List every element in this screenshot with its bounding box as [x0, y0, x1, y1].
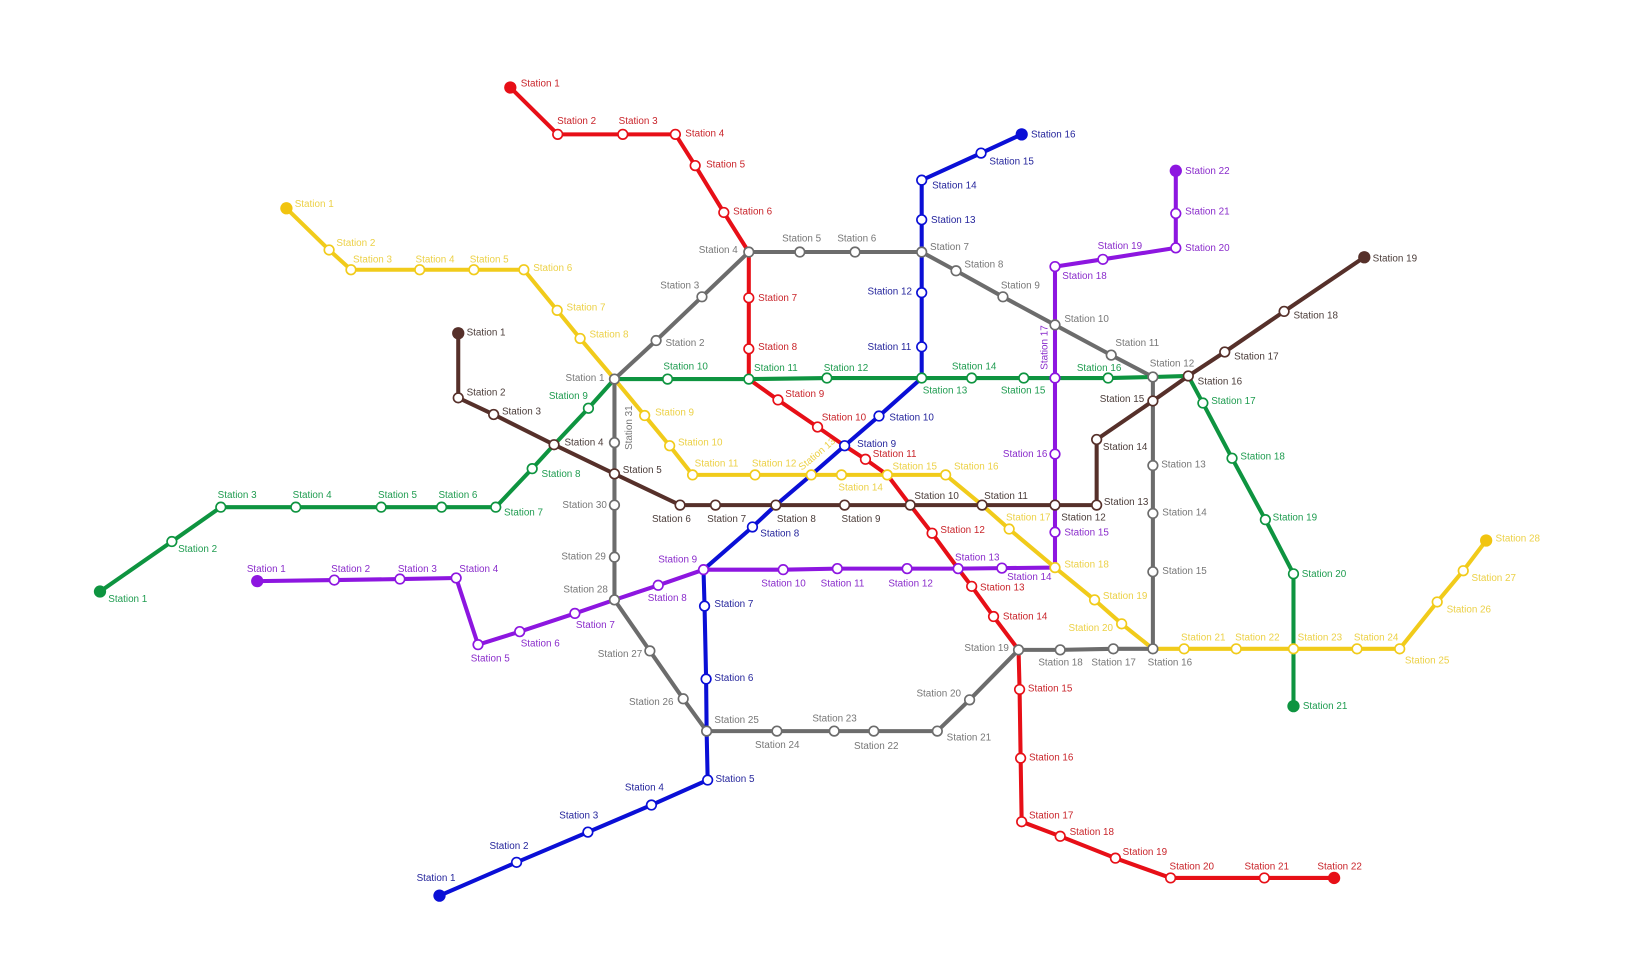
gray line labels: Station 2 [665, 338, 704, 349]
red line labels: Station 8 [758, 342, 798, 353]
brown line labels: Station 17 [1234, 351, 1279, 362]
green line labels: Station 16 [1077, 363, 1122, 374]
red line labels: Station 19 [1123, 847, 1168, 858]
gray line labels: Station 28 [563, 585, 608, 596]
gray line labels: Station 24 [755, 740, 800, 751]
purple line labels: Station 5 [471, 653, 510, 664]
red line labels: Station 17 [1029, 811, 1073, 822]
gray line labels: Station 3 [660, 280, 700, 291]
gray line labels: Station 9 [1001, 280, 1040, 291]
green line labels: Station 8 [542, 469, 581, 480]
purple line route [257, 171, 1176, 645]
blue line labels: Station 9 [857, 439, 897, 450]
purple line stations [251, 165, 1182, 649]
green line labels: Station 4 [293, 490, 332, 501]
gray line labels: Station 14 [1162, 508, 1207, 519]
brown line labels: Station 8 [777, 514, 816, 525]
blue interchanges [840, 441, 849, 451]
green line [94, 362, 1348, 712]
blue line labels: Station 5 [715, 774, 755, 785]
yellow line labels: Station 7 [567, 302, 606, 313]
red line stations [504, 81, 1340, 884]
yellow line labels: Station 12 [752, 459, 796, 470]
red line labels: Station 18 [1070, 827, 1115, 838]
yellow line labels: Station 27 [1472, 573, 1516, 584]
brown line [452, 251, 1418, 525]
red line labels: Station 22 [1317, 862, 1362, 873]
brown line stations [452, 251, 1370, 510]
red line labels: Station 2 [557, 116, 596, 127]
blue line labels: Station 10 [889, 413, 934, 424]
yellow interchanges [807, 470, 1298, 654]
brown line labels: Station 18 [1293, 311, 1338, 322]
brown line labels: Station 9 [841, 514, 881, 525]
purple line labels: Station 11 [821, 578, 865, 589]
green line stations [94, 373, 1300, 712]
purple line labels: Station 17 [1040, 325, 1051, 370]
yellow line labels: Station 20 [1069, 623, 1114, 634]
purple line labels: Station 10 [761, 578, 806, 589]
brown line labels: Station 3 [502, 406, 541, 417]
yellow line labels: Station 17 [1006, 513, 1051, 524]
red line labels: Station 1 [521, 78, 560, 89]
yellow line labels: Station 23 [1298, 632, 1343, 643]
green line labels: Station 21 [1303, 701, 1348, 712]
brown interchanges [549, 371, 1193, 510]
purple line labels: Station 7 [576, 620, 615, 631]
gray line labels: Station 4 [699, 245, 738, 256]
purple line labels: Station 15 [1064, 527, 1109, 538]
red line labels: Station 21 [1245, 862, 1290, 873]
blue line labels: Station 14 [932, 181, 977, 192]
blue line labels: Station 2 [489, 841, 528, 852]
gray line labels: Station 21 [947, 732, 992, 743]
green line labels: Station 7 [504, 508, 543, 519]
red line [504, 78, 1362, 884]
blue line labels: Station 8 [760, 528, 800, 539]
green line labels: Station 12 [824, 363, 868, 374]
yellow line labels: Station 24 [1354, 632, 1399, 643]
gray line labels: Station 26 [629, 697, 674, 708]
blue line labels: Station 15 [989, 157, 1034, 168]
gray line labels: Station 19 [964, 643, 1009, 654]
brown line labels: Station 7 [707, 514, 746, 525]
brown line labels: Station 5 [623, 465, 662, 476]
blue line labels: Station 12 [868, 287, 912, 298]
yellow line labels [295, 199, 1541, 666]
blue line labels: Station 1 [417, 873, 456, 884]
blue line labels: Station 6 [714, 673, 754, 684]
gray line route [614, 252, 1153, 731]
purple line labels: Station 12 [888, 578, 933, 589]
purple line labels: Station 1 [247, 564, 286, 575]
gray interchanges [610, 247, 1158, 736]
blue line [417, 128, 1076, 902]
gray line labels: Station 25 [714, 715, 759, 726]
red line route [510, 87, 1334, 878]
yellow line stations [280, 202, 1492, 654]
brown line labels: Station 13 [1104, 497, 1149, 508]
red line labels: Station 5 [706, 160, 746, 171]
green line route [100, 376, 1293, 706]
gray line labels: Station 18 [1038, 657, 1083, 668]
gray line stations [610, 247, 1158, 736]
gray line labels: Station 20 [916, 689, 961, 700]
yellow line labels: Station 22 [1235, 632, 1280, 643]
red line labels: Station 16 [1029, 752, 1074, 763]
purple interchanges [699, 373, 1060, 574]
purple line labels: Station 14 [1007, 572, 1052, 583]
green line labels: Station 9 [549, 391, 588, 402]
brown line labels: Station 15 [1100, 394, 1145, 405]
gray line labels: Station 16 [1148, 657, 1193, 668]
red line labels: Station 15 [1028, 684, 1073, 695]
yellow line labels: Station 26 [1447, 604, 1492, 615]
green line labels: Station 10 [663, 362, 708, 373]
green line labels: Station 5 [378, 490, 418, 501]
green line labels: Station 3 [218, 490, 257, 501]
yellow line labels: Station 3 [353, 254, 393, 265]
interchange stations [549, 247, 1298, 736]
green line labels: Station 1 [108, 594, 148, 605]
red line labels: Station 11 [873, 449, 917, 460]
blue line labels: Station 11 [868, 342, 912, 353]
yellow line labels: Station 5 [470, 254, 509, 265]
gray line labels: Station 15 [1162, 566, 1207, 577]
blue line labels [417, 129, 1076, 884]
green line labels: Station 17 [1211, 396, 1256, 407]
yellow line labels: Station 25 [1405, 655, 1450, 666]
yellow line labels: Station 14 [838, 483, 883, 494]
yellow line labels: Station 19 [1103, 591, 1148, 602]
yellow line labels: Station 2 [336, 238, 375, 249]
blue line labels: Station 7 [714, 599, 753, 610]
blue line labels: Station 4 [625, 782, 664, 793]
yellow line labels: Station 21 [1181, 632, 1226, 643]
yellow line labels: Station 6 [533, 263, 573, 274]
blue line stations [433, 128, 1028, 902]
gray line labels: Station 31 [624, 405, 635, 450]
green line labels: Station 6 [438, 490, 478, 501]
green line labels [108, 362, 1348, 712]
brown line labels [467, 253, 1418, 525]
gray line labels: Station 10 [1064, 314, 1109, 325]
brown line labels: Station 10 [914, 491, 959, 502]
gray line labels [561, 234, 1207, 752]
red line labels: Station 20 [1170, 862, 1215, 873]
green line labels: Station 14 [952, 362, 997, 373]
yellow line labels: Station 11 [695, 459, 739, 470]
yellow line labels: Station 10 [678, 438, 723, 449]
green line labels: Station 11 [754, 363, 798, 374]
gray line labels: Station 27 [598, 649, 642, 660]
green interchanges [744, 373, 926, 384]
yellow line labels: Station 1 [295, 199, 334, 210]
purple line labels: Station 9 [658, 554, 698, 565]
purple line labels: Station 20 [1185, 243, 1230, 254]
purple line labels: Station 13 [955, 552, 1000, 563]
blue line labels: Station 13 [931, 215, 976, 226]
gray line labels: Station 6 [837, 234, 877, 245]
gray line labels: Station 1 [566, 373, 605, 384]
red line labels: Station 14 [1003, 612, 1048, 623]
gray line labels: Station 8 [964, 260, 1004, 271]
green line labels: Station 15 [1001, 386, 1046, 397]
yellow line labels: Station 13 [797, 436, 838, 473]
yellow line labels: Station 15 [893, 462, 938, 473]
yellow line labels: Station 8 [589, 329, 629, 340]
purple line labels: Station 18 [1062, 271, 1107, 282]
red line labels: Station 3 [619, 116, 658, 127]
yellow line labels: Station 16 [954, 462, 999, 473]
yellow line labels: Station 4 [416, 254, 455, 265]
gray line labels: Station 17 [1091, 657, 1136, 668]
brown line labels: Station 19 [1373, 253, 1418, 264]
gray line labels: Station 30 [562, 500, 607, 511]
red line labels: Station 7 [758, 293, 797, 304]
green line labels: Station 2 [178, 544, 217, 555]
gray line labels: Station 7 [930, 242, 969, 253]
green line labels: Station 18 [1240, 451, 1285, 462]
purple line [247, 165, 1230, 664]
purple line labels: Station 4 [459, 564, 499, 575]
brown line labels: Station 16 [1198, 376, 1243, 387]
red line labels: Station 9 [785, 389, 825, 400]
blue line labels: Station 16 [1031, 129, 1076, 140]
purple line labels: Station 16 [1003, 449, 1048, 460]
purple line labels: Station 22 [1185, 166, 1230, 177]
brown line labels: Station 4 [564, 438, 604, 449]
purple line labels [247, 166, 1230, 664]
gray line labels: Station 23 [812, 714, 857, 725]
gray line [561, 234, 1207, 752]
yellow line labels: Station 9 [655, 408, 695, 419]
yellow line labels: Station 28 [1496, 534, 1541, 545]
brown line route [458, 257, 1364, 505]
gray line labels: Station 29 [561, 551, 606, 562]
purple line labels: Station 19 [1098, 241, 1143, 252]
green line labels: Station 20 [1302, 569, 1347, 580]
purple line labels: Station 3 [398, 564, 437, 575]
red line labels: Station 13 [980, 582, 1025, 593]
yellow line route [286, 208, 1486, 649]
green line labels: Station 13 [923, 386, 968, 397]
brown line labels: Station 14 [1103, 442, 1148, 453]
red line labels [521, 78, 1362, 873]
purple line labels: Station 6 [521, 639, 560, 650]
purple line labels: Station 8 [648, 593, 687, 604]
brown line labels: Station 6 [652, 514, 691, 525]
gray line labels: Station 5 [782, 234, 822, 245]
gray line labels: Station 11 [1115, 338, 1160, 349]
purple line labels: Station 21 [1185, 207, 1230, 218]
red line labels: Station 4 [685, 128, 725, 139]
gray line labels: Station 13 [1161, 460, 1206, 471]
red line labels: Station 12 [940, 525, 985, 536]
brown line labels: Station 12 [1061, 513, 1106, 524]
red line labels: Station 6 [733, 207, 773, 218]
red line labels: Station 10 [822, 413, 867, 424]
purple line labels: Station 2 [331, 564, 370, 575]
gray line labels: Station 22 [854, 741, 898, 752]
yellow line labels: Station 18 [1064, 560, 1109, 571]
yellow line [280, 199, 1541, 666]
blue line labels: Station 3 [559, 811, 599, 822]
brown line labels: Station 11 [984, 491, 1028, 502]
brown line labels: Station 2 [467, 388, 506, 399]
brown line labels: Station 1 [467, 327, 506, 338]
blue line route [439, 134, 1022, 896]
green line labels: Station 19 [1273, 513, 1318, 524]
gray line labels: Station 12 [1150, 359, 1194, 370]
